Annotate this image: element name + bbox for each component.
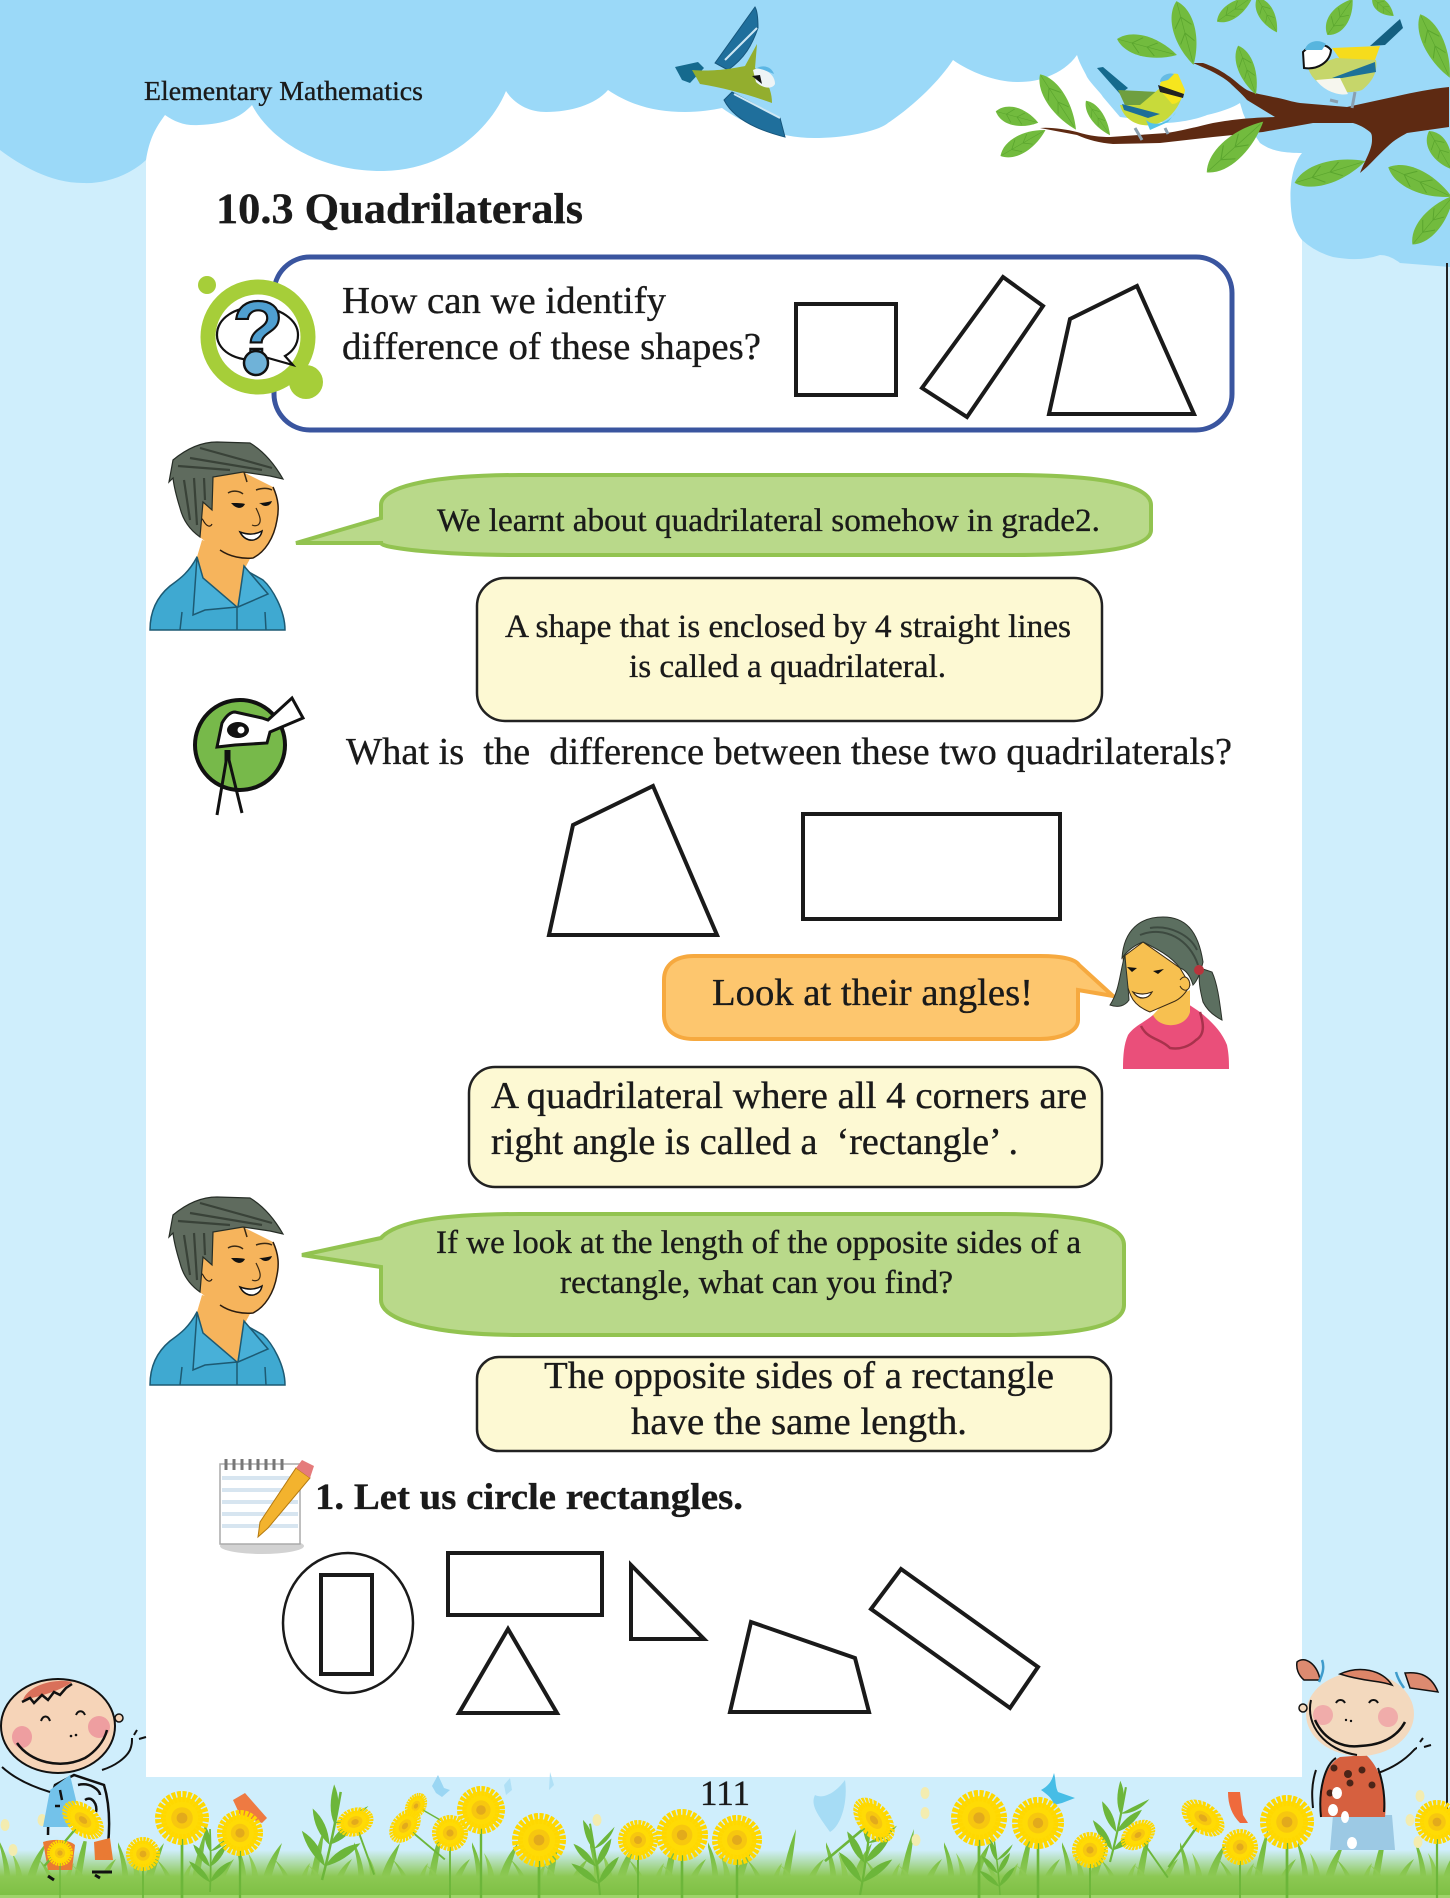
shape: right triangle xyxy=(631,1565,704,1639)
definition box: opposite sides: have the same length. xyxy=(631,1401,967,1443)
icon: question mark bubble: ? xyxy=(232,284,284,378)
definition box: quadrilateral: A shape that is enclosed by 4 straight lines xyxy=(505,609,1071,645)
exercise shapes xyxy=(283,1553,1038,1713)
speech bubble: green 1 xyxy=(296,475,1151,555)
grass xyxy=(0,1777,1450,1898)
section title: 10.3 Quadrilaterals xyxy=(216,186,583,233)
speech bubble: orange xyxy=(664,956,1113,1039)
illustration: flying bird xyxy=(675,7,785,137)
shape: trapezium xyxy=(1049,286,1194,414)
illustration: boy 1 xyxy=(150,442,285,630)
definition box: quadrilateral xyxy=(477,578,1102,721)
icon: notepad and pencil xyxy=(220,1459,314,1554)
running header: Elementary Mathematics xyxy=(144,76,423,106)
page: white content area with cloud edge xyxy=(146,55,1302,1777)
definition box: opposite sides: The opposite sides of a rectangle xyxy=(544,1355,1054,1397)
definition box: quadrilateral: is called a quadrilateral. xyxy=(629,649,946,685)
illustration: left child xyxy=(1,1679,146,1898)
shape: trapezium xyxy=(549,786,717,935)
question text: difference of these shapes? xyxy=(342,326,761,368)
illustration: boy 2 xyxy=(150,1197,285,1385)
definition box: opposite sides xyxy=(477,1355,1111,1451)
illustration: girl xyxy=(1110,917,1229,1069)
speech bubble: green 2: If we look at the length of the opposite sides of a xyxy=(436,1225,1081,1261)
question text: How can we identify xyxy=(342,280,666,322)
speech bubble: green 2: rectangle, what can you find? xyxy=(560,1265,953,1301)
panel: question box xyxy=(198,257,1232,430)
shape: tilted rectangle xyxy=(871,1569,1038,1708)
page number: 111 xyxy=(700,1773,750,1813)
illustration: tree branch with leaves xyxy=(993,0,1450,251)
shape: rectangle xyxy=(803,814,1060,919)
shape: tilted rectangle xyxy=(922,277,1043,417)
definition box: rectangle: right angle is called a ‘rectangle’ . xyxy=(491,1121,1018,1163)
icon: question mark bubble xyxy=(198,276,323,399)
definition box: rectangle: A quadrilateral where all 4 corners are xyxy=(491,1075,1087,1117)
question text xyxy=(342,280,761,368)
icon: hand with compass xyxy=(195,698,303,815)
illustration: butterflies xyxy=(233,1772,1248,1832)
shape: triangle xyxy=(459,1629,557,1713)
shape: trapezium xyxy=(730,1622,869,1712)
illustration: bird on branch xyxy=(1097,67,1185,140)
shape: square xyxy=(796,304,896,395)
shape: tall rectangle xyxy=(321,1575,372,1674)
illustration: bird on upper branch xyxy=(1303,19,1403,108)
speech bubble: green 2 xyxy=(302,1214,1124,1335)
question: difference: What is the difference between these two quadrilaterals? xyxy=(346,731,1232,773)
illustration: right child xyxy=(1297,1660,1438,1850)
speech bubble: orange: Look at their angles! xyxy=(712,972,1033,1014)
sky xyxy=(0,0,1450,267)
drawn circle around rectangle xyxy=(283,1553,413,1693)
speech bubble: green 1: We learnt about quadrilateral somehow in grade2. xyxy=(437,503,1100,539)
definition box: rectangle xyxy=(469,1067,1102,1187)
buds xyxy=(0,1787,1424,1856)
flowers xyxy=(129,1791,1450,1898)
shape: wide rectangle xyxy=(448,1553,602,1615)
exercise heading: 1. Let us circle rectangles. xyxy=(315,1477,743,1518)
